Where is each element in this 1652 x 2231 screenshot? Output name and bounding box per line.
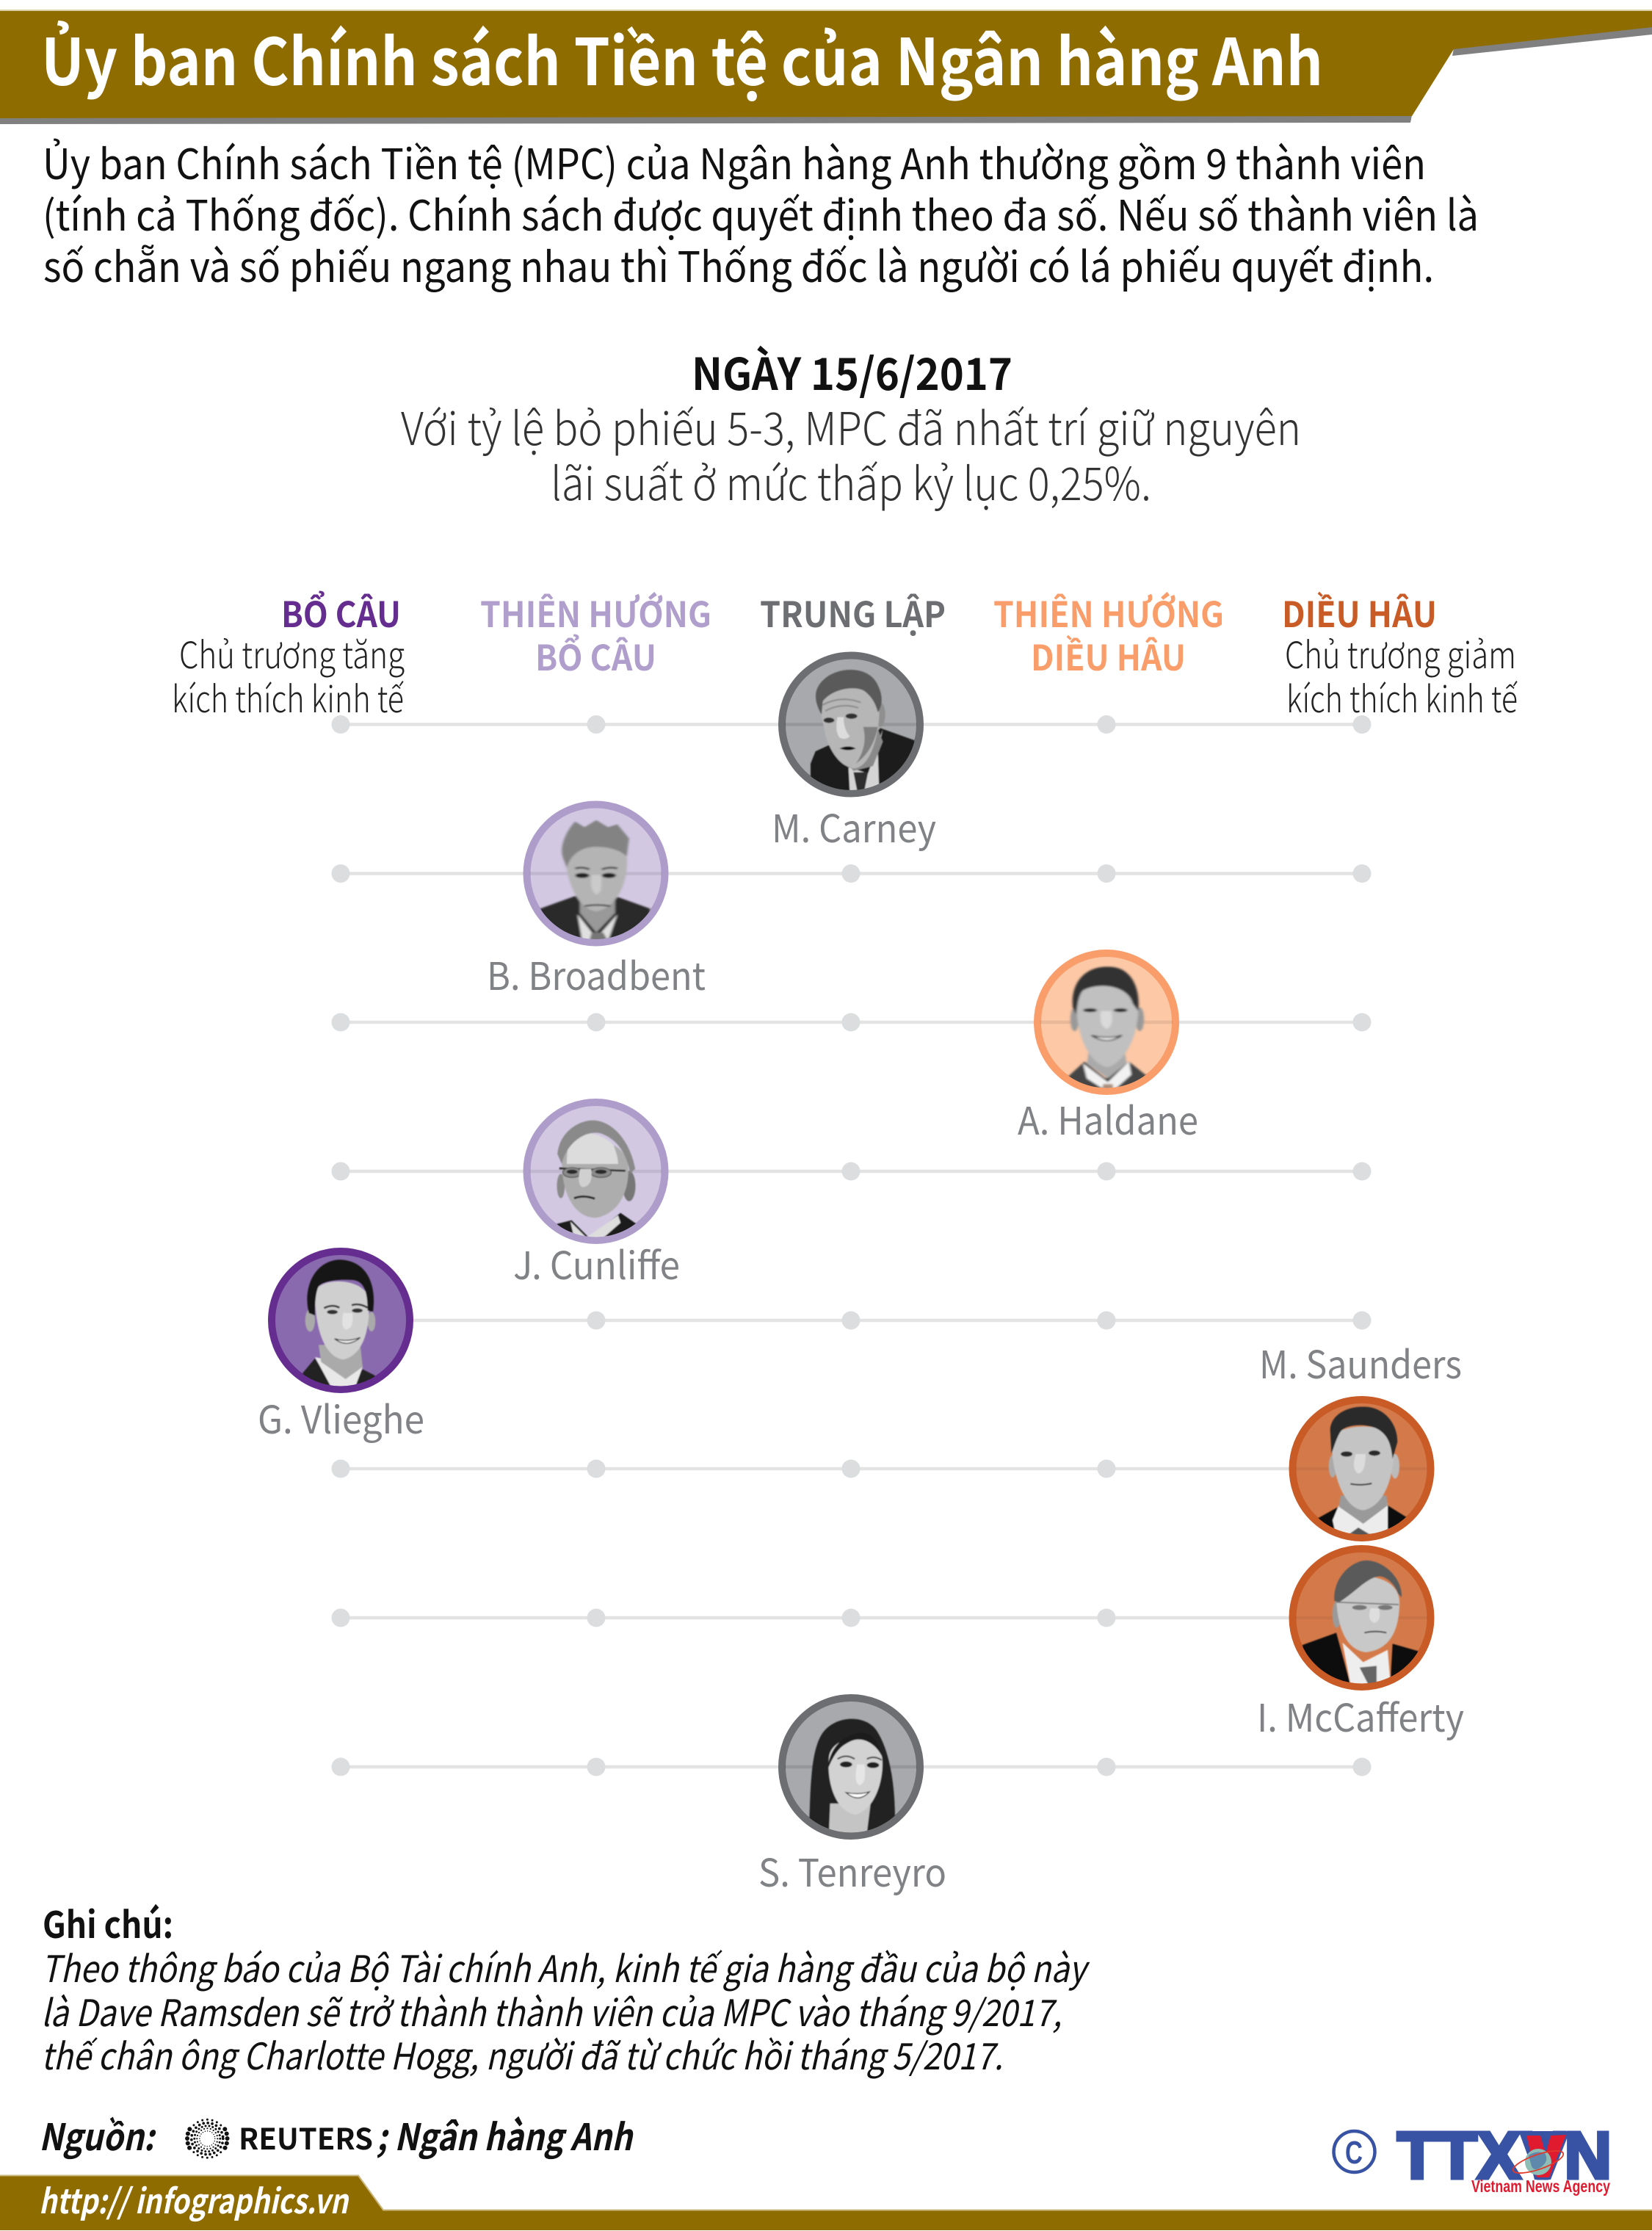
website: http:// infographics.vn: [39, 2175, 349, 2224]
note: thế chân ông Charlotte Hogg, người đã từ chức hồi tháng 5/2017.: [41, 2028, 1003, 2080]
portrait: G. Vlieghe: [272, 1251, 410, 1392]
column header: dove: kích thích kinh tế: [172, 670, 404, 723]
name: M. Saunders: M. Saunders: [1259, 1334, 1462, 1389]
column header: lean dove: THIÊN HƯỚNG: [480, 586, 711, 637]
source line: REUTERS: [239, 2116, 373, 2158]
icon: Reuters dot globe: [187, 2119, 228, 2158]
portrait: J. Cunliffe: [527, 1102, 665, 1243]
portrait: B. Broadbent: [527, 805, 665, 947]
intro paragraph: [43, 131, 1479, 294]
column header: lean hawk: DIỀU HÂU: [1031, 629, 1186, 681]
column header: dove: [172, 586, 405, 723]
portrait: M. Carney: [782, 655, 920, 800]
intro paragraph: số chẵn và số phiếu ngang nhau thì Thống đốc là người có lá phiếu quyết định.: [43, 234, 1434, 294]
scale rows: [332, 715, 1372, 1776]
intro paragraph: Ủy ban Chính sách Tiền tệ (MPC) của Ngân hàng Anh thường gồm 9 thành viên: [43, 131, 1426, 192]
column header: neutral: TRUNG LẬP: [760, 586, 946, 637]
name: I. McCafferty: I. McCafferty: [1257, 1688, 1464, 1743]
note: Theo thông báo của Bộ Tài chính Anh, kinh tế gia hàng đầu của bộ này: [41, 1940, 1090, 1993]
vote summary: Với tỷ lệ bỏ phiếu 5-3, MPC đã nhất trí giữ nguyên: [401, 392, 1301, 458]
column header: hawk: DIỀU HÂU: [1282, 586, 1437, 637]
TTXVN logo: TTXVN: [1397, 2119, 1612, 2193]
column header: hawk: Chủ trương giảm: [1285, 626, 1516, 679]
portrait: I. McCafferty: [1292, 1549, 1430, 1691]
column header: lean dove: BỔ CÂU: [535, 629, 656, 681]
note: Ghi chú:: [43, 1896, 173, 1949]
name: G. Vlieghe: G. Vlieghe: [258, 1389, 424, 1444]
TTXVN logo: Vietnam News Agency: [1471, 2177, 1610, 2196]
date heading: NGÀY 15/6/2017: [692, 339, 1012, 403]
copyright icon: [1333, 2131, 1374, 2172]
name: J. Cunliffe: J. Cunliffe: [513, 1235, 680, 1290]
source line: [39, 2108, 634, 2161]
name: M. Carney: M. Carney: [772, 798, 936, 853]
vote summary: lãi suất ở mức thấp kỷ lục 0,25%.: [551, 447, 1151, 513]
name: S. Tenreyro: S. Tenreyro: [758, 1843, 946, 1898]
portrait: S. Tenreyro: [782, 1698, 920, 1836]
footer band: [0, 2175, 1652, 2230]
source line: Nguồn:: [39, 2108, 156, 2161]
portrait: M. Saunders: [1292, 1400, 1430, 1542]
copyright icon: C: [1345, 2135, 1363, 2171]
vote summary: [401, 392, 1301, 513]
portrait: A. Haldane: [1037, 953, 1175, 1097]
name: A. Haldane: A. Haldane: [1018, 1091, 1198, 1146]
source line: ; Ngân hàng Anh: [377, 2108, 634, 2161]
note: là Dave Ramsden sẽ trở thành thành viên của MPC vào tháng 9/2017,: [41, 1984, 1062, 2037]
column header: dove: BỔ CÂU: [281, 586, 401, 637]
name: B. Broadbent: B. Broadbent: [487, 946, 706, 1001]
title: Ủy ban Chính sách Tiền tệ của Ngân hàng Anh: [41, 11, 1323, 104]
column header: lean dove: [480, 586, 711, 681]
column header: hawk: kích thích kinh tế: [1286, 670, 1518, 723]
note: [41, 1896, 1090, 2080]
column header: dove: Chủ trương tăng: [179, 626, 405, 679]
title banner: [0, 10, 1652, 124]
column header: lean hawk: THIÊN HƯỚNG: [993, 586, 1224, 637]
intro paragraph: (tính cả Thống đốc). Chính sách được quyết định theo đa số. Nếu số thành viên là: [43, 183, 1479, 243]
column header: hawk: [1282, 586, 1518, 723]
column header: lean hawk: [993, 586, 1224, 681]
